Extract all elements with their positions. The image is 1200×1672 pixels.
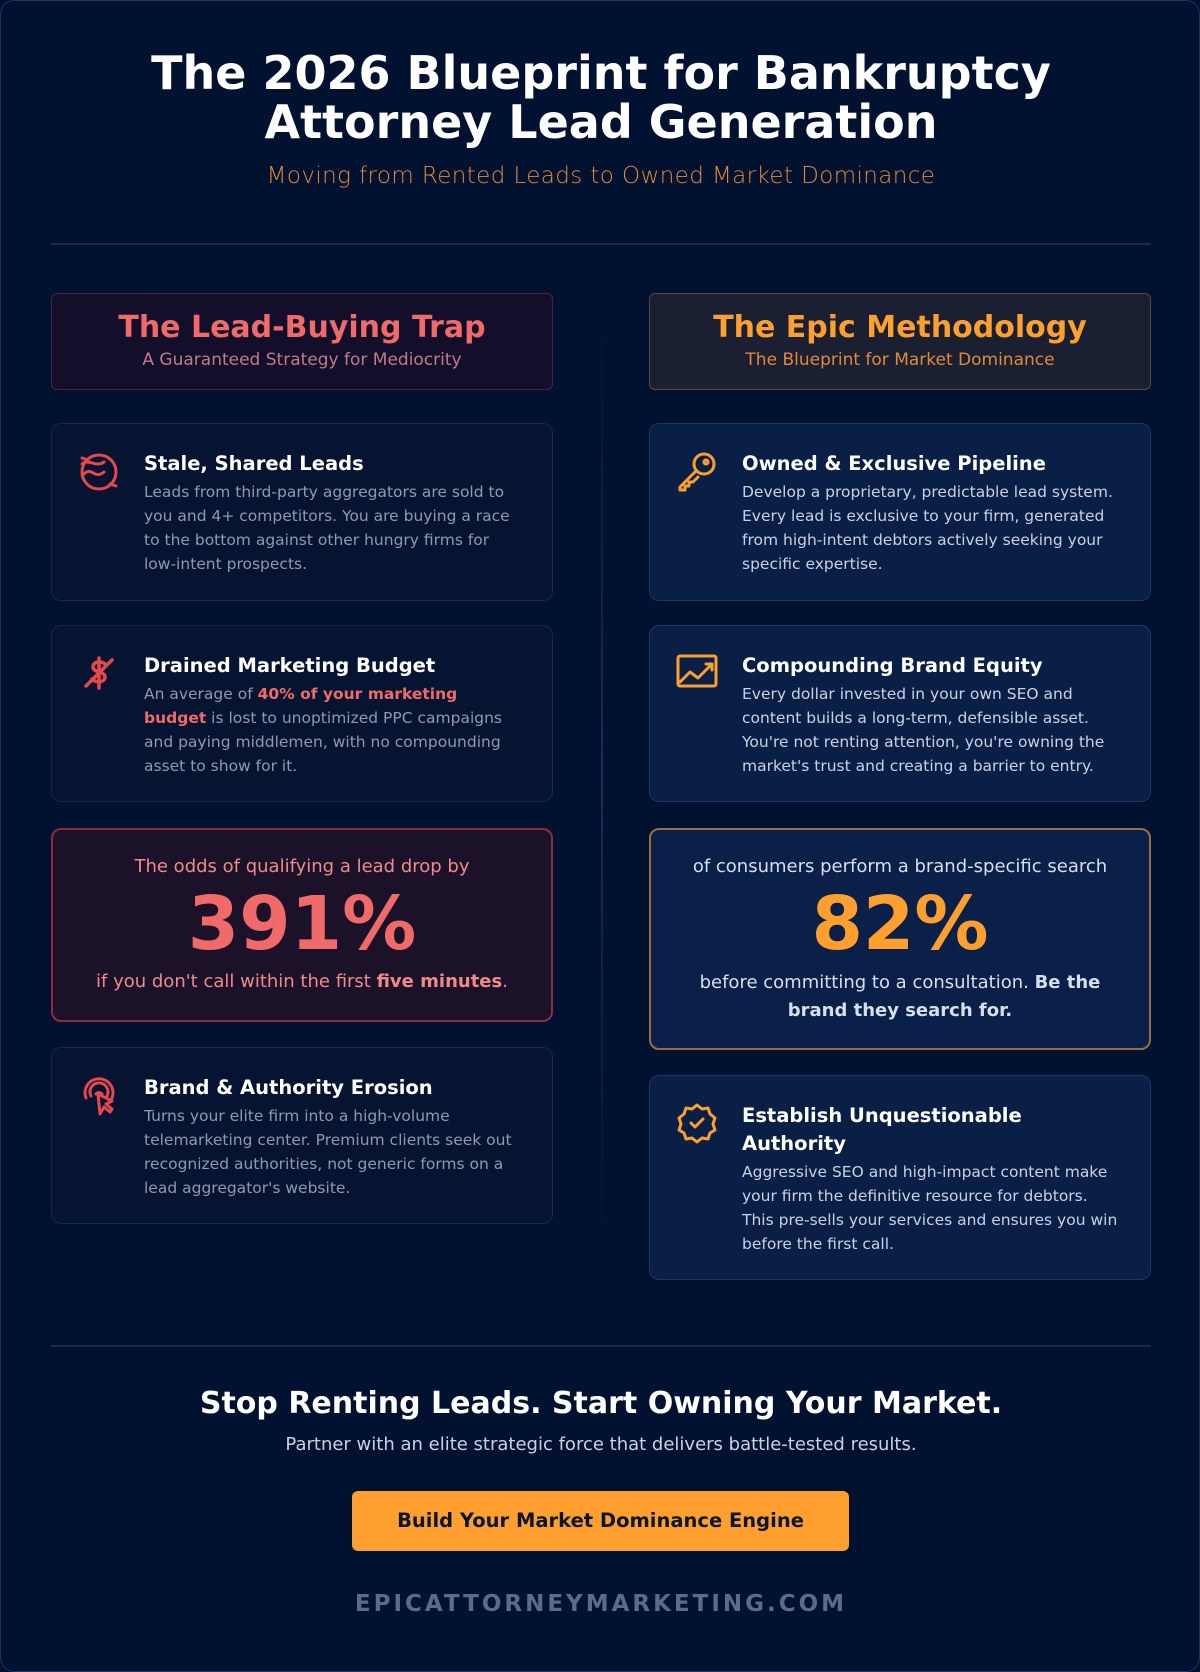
title [151, 46, 1051, 149]
card: owned pipeline [649, 423, 1151, 601]
header: epic methodology: The Epic Methodology [713, 310, 1087, 345]
stat: 82%: of consumers perform a brand-specific search [693, 856, 1107, 877]
card: authority [649, 1075, 1151, 1280]
icon: tangled circle [80, 454, 118, 490]
card: drained budget [51, 625, 553, 802]
header: lead-buying trap [51, 293, 553, 390]
card: brand erosion: Brand & Authority Erosion [144, 1076, 433, 1099]
card: drained budget: Drained Marketing Budget [144, 654, 435, 677]
stat: 391% [51, 828, 553, 1022]
icon: key [678, 452, 716, 492]
stat: 82%: before committing to a consultation. Be the brand they search for. [700, 972, 1100, 1021]
card: owned pipeline: Develop a proprietary, predictable lead system. Every lead is exclusive to your firm, generated from high-intent debtors actively seeking your specific expertise. [742, 483, 1113, 573]
stat: 82%: 82% [811, 881, 989, 967]
card: brand erosion: Turns your elite firm into a high-volume telemarketing center. Premium clients seek out recognized authorities, not generic forms on a lead aggregator's website. [144, 1107, 512, 1197]
footer url: EPICATTORNEYMARKETING.COM [355, 1591, 847, 1617]
CTA button [352, 1491, 849, 1551]
card: brand equity: Every dollar invested in your own SEO and content builds a long-term, defensible asset. You're not renting attention, you're owning the market's trust and creating a barrier to entry. [742, 685, 1104, 775]
card: stale shared leads: Leads from third-party aggregators are sold to you and 4+ competitors. You are buying a race to the bottom against other hungry firms for low-intent prospects. [144, 483, 510, 573]
stat: 82% [649, 828, 1151, 1050]
header: lead-buying trap: A Guaranteed Strategy for Mediocrity [142, 350, 462, 370]
subtitle: Moving from Rented Leads to Owned Market Dominance [267, 163, 935, 189]
card: owned pipeline: Owned & Exclusive Pipeline [742, 452, 1046, 475]
header: lead-buying trap: The Lead-Buying Trap [118, 310, 486, 345]
title: The 2026 Blueprint for Bankruptcy [151, 46, 1051, 100]
stat: 391%: 391% [188, 881, 416, 967]
icon: badge check [678, 1104, 716, 1144]
CTA button: Build Your Market Dominance Engine [397, 1509, 804, 1532]
card: authority: Establish Unquestionable Authority [742, 1104, 1022, 1155]
CTA subtext: Partner with an elite strategic force that delivers battle-tested results. [285, 1434, 917, 1455]
card: brand equity [649, 625, 1151, 802]
header: epic methodology [649, 293, 1151, 390]
card: drained budget: An average of 40% of your marketing budget is lost to unoptimized PPC campaigns and paying middlemen, with no compounding asset to show for it. [144, 685, 502, 775]
title: Attorney Lead Generation [264, 95, 938, 149]
header: epic methodology: The Blueprint for Market Dominance [745, 350, 1055, 370]
card: authority: Aggressive SEO and high-impact content make your firm the definitive resource for debtors. This pre-sells your services and ensures you win before the first call. [742, 1163, 1117, 1253]
stat: 391%: if you don't call within the first five minutes. [96, 971, 508, 992]
icon: chart frame [676, 654, 718, 688]
stat: 391%: The odds of qualifying a lead drop by [134, 856, 470, 877]
icon: pointer signal [84, 1077, 114, 1116]
card: brand erosion [51, 1047, 553, 1224]
card: brand equity: Compounding Brand Equity [742, 654, 1043, 677]
icon: crossed dollar [84, 656, 114, 690]
card: stale shared leads [51, 423, 553, 601]
CTA heading: Stop Renting Leads. Start Owning Your Market. [200, 1386, 1002, 1421]
card: stale shared leads: Stale, Shared Leads [144, 452, 364, 475]
